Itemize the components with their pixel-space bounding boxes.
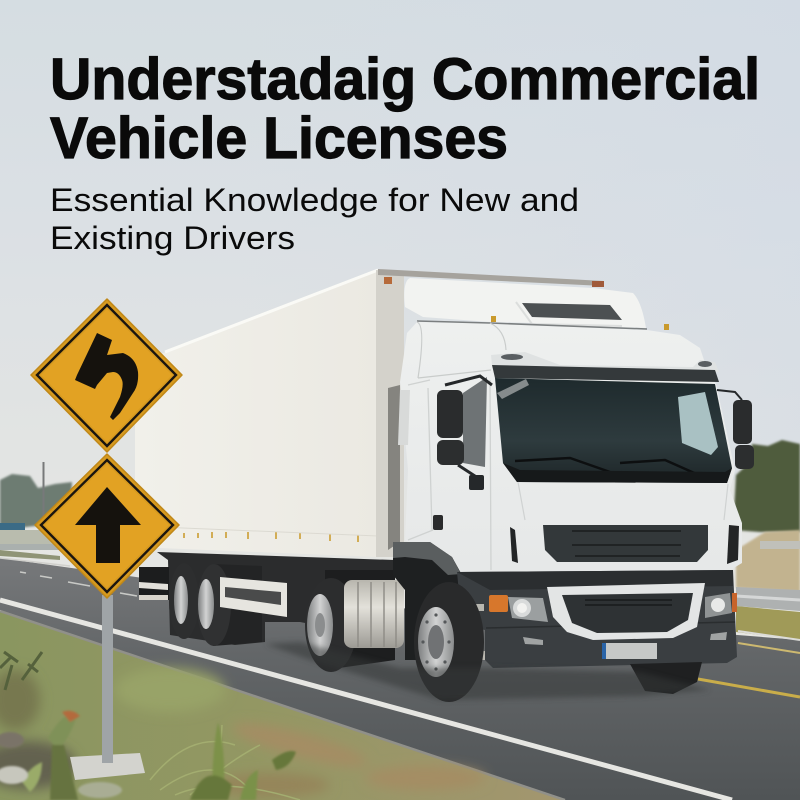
front grille — [543, 525, 708, 562]
subtitle — [50, 182, 579, 256]
left mirror arms — [445, 376, 492, 478]
right upper mirror — [733, 400, 752, 444]
white bumper trim — [547, 583, 705, 640]
left tree line — [0, 474, 72, 530]
right headlight — [705, 593, 737, 618]
sign post — [102, 595, 113, 763]
door handle — [433, 515, 443, 530]
right field — [736, 530, 800, 592]
roadside verge — [0, 611, 565, 800]
blurred leaves — [0, 711, 296, 800]
truck — [135, 269, 754, 702]
license plate — [602, 643, 657, 659]
roof light strip — [491, 352, 719, 372]
ahead arrow sign — [35, 454, 179, 598]
cab contour lines — [417, 322, 506, 378]
left guard rail — [0, 530, 70, 560]
right lane lines — [738, 631, 800, 640]
fog lamps — [523, 632, 727, 645]
grass blades — [150, 725, 300, 800]
front panel crease — [518, 482, 728, 520]
amber roof beacons — [491, 316, 496, 322]
mid axle wheel — [305, 570, 395, 672]
white shoulder line — [0, 600, 732, 800]
box top rail — [378, 269, 604, 286]
box body — [135, 269, 604, 557]
subtitle: Essential Knowledge for New and — [50, 182, 579, 218]
windshield — [495, 378, 732, 483]
right air vent — [727, 525, 739, 564]
right access road — [760, 541, 800, 549]
dry soil patches — [0, 668, 485, 797]
rear light bar — [139, 567, 169, 600]
title: Understadaig Commercial — [50, 47, 760, 112]
utility pole — [42, 462, 44, 524]
left air vent — [510, 527, 518, 563]
road — [0, 558, 800, 800]
grey interior mirror — [497, 379, 529, 399]
amber side markers — [184, 532, 358, 542]
sky background — [0, 0, 800, 640]
sun visor — [492, 365, 719, 382]
curve warning sign — [31, 299, 182, 452]
title: Vehicle Licenses — [50, 106, 508, 171]
left headlight — [489, 595, 548, 622]
deflector shadow line — [417, 321, 647, 329]
rear underbody and wheels — [139, 552, 395, 646]
wheel bolts — [421, 613, 451, 671]
lower grille — [562, 593, 693, 633]
right tree line — [733, 440, 800, 532]
title — [50, 47, 760, 171]
aerodynamic roof deflector — [404, 278, 646, 328]
front left tyre — [414, 582, 484, 702]
left shrub — [0, 652, 42, 690]
bumper block — [457, 570, 737, 668]
mirrors — [437, 376, 754, 490]
subtitle: Existing Drivers — [50, 220, 295, 256]
left lower mirror — [437, 440, 464, 465]
curve icon — [75, 333, 138, 420]
right grass strip — [736, 606, 800, 640]
fuel tank — [344, 580, 404, 648]
left upper mirror — [437, 390, 463, 438]
right mirror arm — [717, 390, 742, 400]
side window — [463, 377, 487, 467]
step plates — [458, 604, 485, 660]
centre dashes — [20, 572, 137, 596]
sign post base — [70, 753, 145, 780]
right lower mirror — [735, 445, 754, 469]
road shadow under truck — [265, 642, 710, 700]
front left rim — [418, 607, 454, 677]
side under-run guard — [220, 577, 287, 617]
road edge line left — [0, 558, 70, 566]
blue roadside sign — [0, 523, 25, 533]
door vent slats — [398, 390, 410, 445]
rear tyre 2 — [213, 564, 262, 646]
wiper blades — [515, 458, 710, 480]
road sign assembly — [31, 299, 182, 780]
foreground plants — [0, 652, 296, 800]
arrow icon — [75, 487, 141, 563]
rear tyre 1 — [169, 563, 199, 639]
wheel arch — [393, 542, 462, 660]
front wheels — [414, 582, 702, 702]
right guard rail — [736, 587, 800, 611]
roof vent — [522, 303, 622, 320]
box front post — [376, 270, 404, 557]
distant scenery — [0, 440, 800, 640]
cab side and front — [398, 316, 742, 572]
front bumper and chassis — [393, 542, 737, 668]
front right tyre — [630, 662, 702, 694]
